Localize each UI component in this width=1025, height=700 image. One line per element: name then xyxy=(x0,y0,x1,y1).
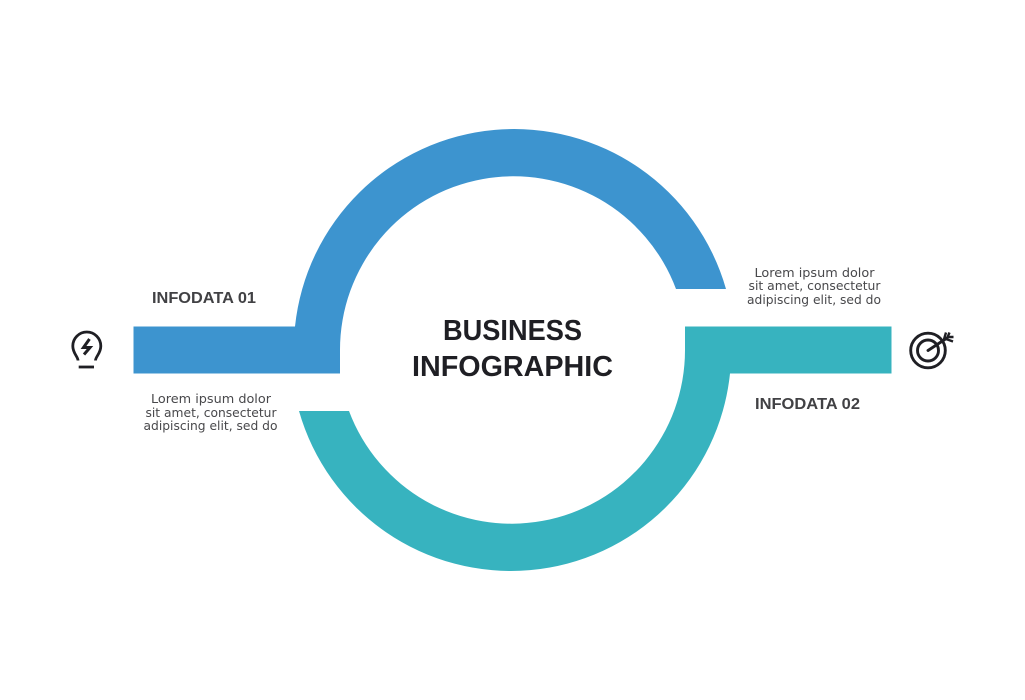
icon: target with arrow xyxy=(911,332,954,368)
title: BUSINESS xyxy=(443,315,582,347)
teal arc segment with right bar xyxy=(299,326,892,571)
icon: light bulb with bolt xyxy=(73,332,101,367)
text block: left description xyxy=(144,392,278,434)
heading: infodata 01: INFODATA 01 xyxy=(152,290,256,307)
text block: right description: sit amet, consectetur xyxy=(748,279,881,294)
title: INFOGRAPHIC xyxy=(412,351,613,383)
title xyxy=(412,315,613,383)
text block: left description: adipiscing elit, sed do xyxy=(144,419,278,434)
text block: left description: Lorem ipsum dolor xyxy=(151,392,272,407)
text block: left description: sit amet, consectetur xyxy=(146,406,277,421)
text block: right description xyxy=(747,266,881,308)
text block: right description: adipiscing elit, sed do xyxy=(747,293,881,308)
text block: right description: Lorem ipsum dolor xyxy=(754,266,875,281)
blue arc segment with left bar xyxy=(134,129,726,374)
heading: infodata 02: INFODATA 02 xyxy=(755,396,860,413)
